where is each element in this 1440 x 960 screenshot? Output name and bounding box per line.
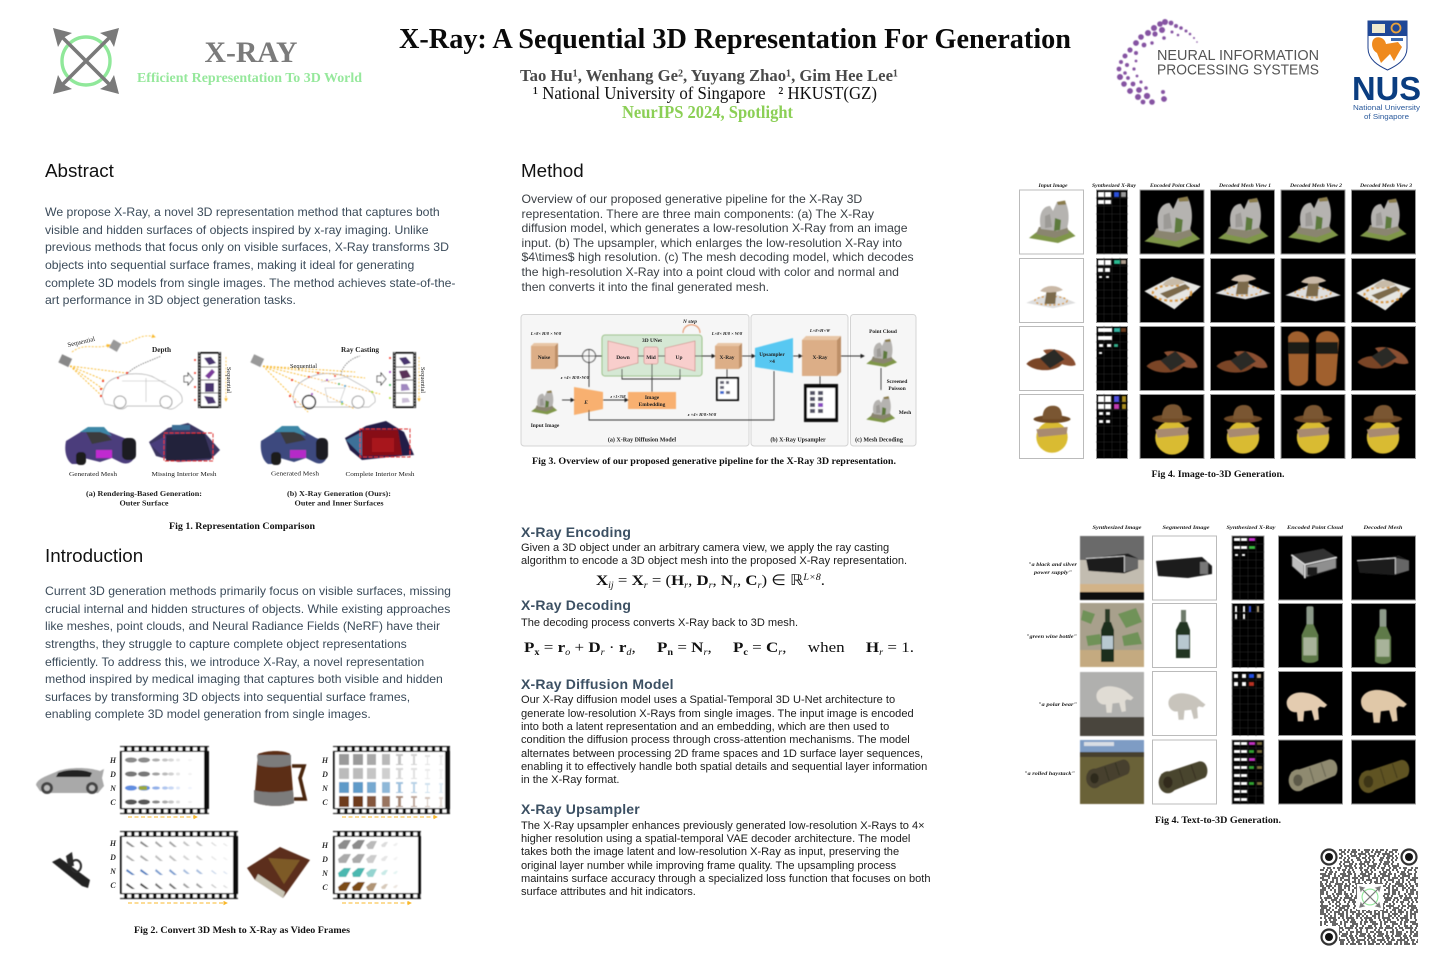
panel: abstract (45, 160, 456, 307)
equation: encoding: N (721, 573, 733, 589)
pipeline labels: Down (616, 355, 630, 361)
channel labels H D N C: D (321, 770, 328, 779)
NeurIPS logo: PROCESSING SYSTEMS (1157, 62, 1319, 78)
equation: decoding: D (588, 640, 601, 656)
header logo: X-Ray: Efficient Representation To 3D World (137, 70, 363, 85)
column headers: Synthesized Image (1092, 525, 1142, 531)
heading: x-ray diffusion model: X-Ray Diffusion Model (521, 676, 674, 692)
column headers (1092, 525, 1403, 531)
rendered meshes (65, 421, 414, 465)
decoded objects (1287, 549, 1409, 793)
figure 5: text-to-3D generation (1024, 525, 1416, 825)
NUS logo: of Singapore (1364, 112, 1409, 121)
column headers (1037, 183, 1412, 189)
introduction text: enabling complete 3D model generation from single images. (45, 707, 371, 721)
equation: decoding: x (534, 647, 540, 657)
text prompts: "a rolled haystack" (1024, 771, 1075, 777)
header logo: X-Ray (53, 28, 363, 94)
pipeline labels: Up (676, 355, 682, 361)
equation: encoding: X (596, 573, 608, 589)
pipeline labels: Point Cloud (869, 329, 897, 335)
abstract text: visible and hidden surfaces of objects inspired by x-ray imaging. Unlike (45, 223, 429, 237)
introduction text: Current 3D generation methods primarily focus on visible surfaces, missing (45, 584, 451, 598)
introduction text: efficiently. To address this, we introduce X-Ray, a novel representation (45, 655, 424, 669)
upsampler text: maintains surface accuracy through a specialized loss function that focuses on both (521, 873, 931, 885)
figure 1 text labels: Sequential (67, 336, 96, 349)
abstract text (45, 205, 456, 307)
text prompts: "a polar bear" (1038, 702, 1077, 708)
x-ray frames (1096, 190, 1128, 458)
title: X-Ray: A Sequential 3D Representation For Generation (399, 23, 1071, 55)
equation: decoding: r (558, 640, 566, 656)
channel labels H D N C: H (321, 756, 329, 765)
equation: decoding: r (703, 647, 708, 657)
NeurIPS logo: NEURAL INFORMATION (1157, 47, 1319, 64)
equation: encoding: , (737, 573, 745, 589)
equation: decoding: = 1. (883, 640, 914, 656)
introduction text: method inspired by medical imaging that captures both visible and hidden (45, 672, 443, 686)
panel backgrounds (521, 314, 916, 446)
column headers: Synthesized X-Ray (1226, 525, 1276, 531)
heading: introduction: Introduction (45, 545, 143, 566)
abstract text: objects into sequential surface frames, making it ideal for generating (45, 258, 414, 272)
abstract text: art performance in 3D object generation tasks. (45, 293, 296, 307)
pipeline labels: Image (645, 395, 660, 401)
diffusion text: enabling it to effectively handle both spatial details and sequential layer information (521, 761, 927, 773)
equation: decoding: = (748, 640, 766, 656)
figure 5 caption: Fig 4. Text-to-3D Generation. (1155, 815, 1281, 825)
film strip 2 (333, 746, 450, 814)
panel: x-ray encoding (521, 524, 907, 590)
pipeline labels: (b) X-Ray Upsampler (770, 436, 826, 444)
equation: decoding: N (691, 640, 704, 656)
method text (522, 192, 914, 294)
equation: encoding: r (644, 580, 648, 590)
decoding text: The decoding process converts X-Ray back to 3D mesh. (521, 617, 798, 629)
NUS logo: National University (1353, 103, 1420, 112)
diffusion text: condition the diffusion process through cross-attention mechanisms. The model (521, 734, 910, 746)
heading: method: Method (521, 160, 584, 181)
figure 1 text labels: (a) Rendering-Based Generation: (86, 491, 202, 498)
figure 1 text labels: Outer Surface (120, 500, 168, 508)
pipeline labels: ×4 (769, 359, 775, 365)
pipeline labels: (a) X-Ray Diffusion Model (608, 436, 676, 444)
method text: the high-resolution X-Ray into a point cloud with color and normal and (522, 265, 899, 279)
channel labels H D N C (109, 756, 329, 892)
introduction text (45, 584, 451, 721)
text prompts: "a black and silver (1028, 562, 1078, 568)
left scheme: rendering based (58, 336, 226, 409)
equation: decoding: c (743, 647, 748, 657)
equation: decoding: = (540, 640, 558, 656)
channel labels H D N C: N (321, 784, 329, 793)
equation: decoding: n (667, 647, 673, 657)
synthesized images (1080, 536, 1144, 804)
NUS logo (1352, 21, 1421, 121)
abstract text: complete 3D models from single images. The method achieves state-of-the- (45, 276, 456, 290)
equation: decoding: r (601, 647, 605, 657)
authors and affiliations: ¹ National University of Singapore ² HKUST(GZ) (533, 83, 877, 103)
pipeline labels: X-Ray (720, 355, 735, 361)
diffusion text: alternates between processing 2D frame spaces and 1D surface layer sequences, (521, 748, 923, 760)
channel labels H D N C: C (322, 883, 328, 892)
film strip 4 (333, 831, 421, 899)
figure 3: generative pipeline (521, 314, 916, 466)
figure 1 text labels: Generated Mesh (271, 470, 320, 478)
equation: decoding: , (707, 640, 733, 656)
figure 4: image-to-3D generation (1020, 183, 1416, 479)
heading: x-ray upsampler: X-Ray Upsampler (521, 801, 640, 817)
figure 1 text labels: Ray Casting (341, 347, 380, 354)
pipeline labels: Embedding (639, 402, 666, 408)
upsampler text: takes both the image latent and low-resolution X-Ray as input, preserving the (521, 846, 899, 858)
column headers: Decoded Mesh View 1 (1218, 183, 1271, 189)
text prompts: power supply" (1033, 570, 1072, 576)
equation: decoding: P (657, 640, 667, 656)
channel labels H D N C: D (321, 855, 328, 864)
column headers: Input Image (1037, 183, 1068, 189)
channel labels H D N C: N (321, 869, 329, 878)
channel labels H D N C: D (109, 770, 116, 779)
figure 2 caption: Fig 2. Convert 3D Mesh to X-Ray as Video Frames (134, 925, 351, 935)
panel: method (521, 160, 914, 294)
x-ray frames (1232, 536, 1264, 804)
pipeline labels: Noise (538, 355, 551, 361)
equation: decoding: r (619, 640, 627, 656)
equation: encoding: r (684, 580, 689, 590)
pipeline labels: Poisson (888, 386, 906, 392)
equation: encoding: ) ∈ ℝ (761, 573, 803, 589)
figure 1 caption: Fig 1. Representation Comparison (169, 521, 315, 531)
introduction text: surfaces by transforming 3D objects into sequential surface frames, (45, 690, 410, 704)
figure 1 text labels: Depth (152, 347, 171, 354)
column headers: Decoded Mesh (1362, 525, 1403, 531)
upsampler text (521, 820, 931, 898)
equation: encoding: r (733, 580, 738, 590)
equation: decoding: r (879, 647, 884, 657)
frame order arrows (128, 817, 437, 903)
figure 1 text labels: Complete Interior Mesh (346, 471, 415, 478)
method text: $4\times$ high resolution. (c) The mesh decoding model, which decodes (522, 250, 914, 264)
upsampler text: surface attributes and hit indicators. (521, 886, 696, 898)
heading: abstract: Abstract (45, 160, 115, 181)
encoding text: Given a 3D object under an arbitrary camera view, we apply the ray casting (521, 542, 889, 554)
generated objects (1026, 196, 1411, 455)
upsampler text: original layer number while improving frame quality. The upsampling process (521, 860, 897, 872)
pipeline labels: L×8× H/8 × W/8 (711, 331, 743, 336)
figure 3 caption: Fig 3. Overview of our proposed generative pipeline for the X-Ray 3D representation. (532, 456, 896, 466)
figure 1 text labels (67, 336, 426, 508)
encoding text: algorithm to encode a 3D object mesh into the proposed X-Ray representation. (521, 555, 907, 567)
channel labels H D N C: N (109, 867, 117, 876)
column headers: Decoded Mesh View 3 (1359, 183, 1412, 189)
input images (1020, 190, 1084, 458)
channel labels H D N C: N (109, 784, 117, 793)
equation: encoding: = ( (648, 573, 671, 589)
encoding text (521, 542, 907, 567)
introduction text: like meshes, point clouds, and Neural Radiance Fields (NeRF) have their (45, 619, 440, 633)
x-ray and decoded cells (1232, 536, 1416, 804)
equation: decoding: o (565, 647, 571, 657)
column headers: Encoded Point Cloud (1149, 183, 1200, 189)
figure 1 text labels: Sequential (290, 363, 317, 370)
column headers: Segmented Image (1162, 525, 1210, 531)
method text: diffusion model, which generates a low-resolution X-Ray from an image (522, 221, 908, 235)
equation: decoding: r (778, 647, 783, 657)
upsampler text: higher resolution using a spatial-temporal VAE decoder architecture. The model (521, 833, 910, 845)
pipeline labels: E (583, 400, 588, 406)
figure 1 text labels: Missing Interior Mesh (152, 471, 217, 478)
figure 4 caption: Fig 4. Image-to-3D Generation. (1152, 469, 1284, 479)
heading: x-ray encoding: X-Ray Encoding (521, 524, 631, 540)
channel labels H D N C: H (321, 841, 329, 850)
authors and affiliations (520, 66, 898, 122)
right scheme: x-ray generation (250, 352, 419, 412)
figure 1 text labels: Sequential (225, 367, 232, 393)
figure 1 text labels: Sequential (419, 367, 426, 393)
equation: decoding: C (766, 640, 778, 656)
figure 1: representation comparison (58, 336, 426, 531)
introduction text: crucial internal and hidden structures of objects. While existing approaches (45, 602, 450, 616)
equation: decoding: = (673, 640, 691, 656)
authors and affiliations: NeurIPS 2024, Spotlight (622, 102, 793, 122)
pipeline labels: (c) Mesh Decoding (855, 436, 903, 444)
equation: decoding: · (605, 640, 619, 656)
diffusion text (521, 694, 927, 786)
objects: car, mug, gun, book (36, 751, 310, 898)
equation: decoding: H (866, 640, 880, 656)
equation: encoding: r (758, 580, 762, 590)
pipeline labels: 3D UNet (642, 338, 662, 344)
method text: input. (b) The upsampler, which enlarges the low-resolution X-Ray into (522, 236, 902, 250)
pipeline labels: z ×4× H/8×W/8 (560, 375, 590, 380)
channel labels H D N C: H (109, 756, 117, 765)
text prompts (1024, 562, 1078, 777)
method text: then converts it into the final generated mesh. (522, 280, 769, 294)
pipeline labels: L×8×H×W (809, 328, 831, 333)
method text: Overview of our proposed generative pipeline for the X-Ray 3D (522, 192, 862, 206)
channel labels H D N C: D (109, 853, 116, 862)
equation: decoding: P (733, 640, 743, 656)
film strip 1 (120, 746, 209, 814)
equation: decoding: d (626, 647, 632, 657)
upsampler text: The X-Ray upsampler enhances previously generated low-resolution X-Rays to 4× (521, 820, 925, 832)
text prompts: "green wine bottle" (1026, 634, 1077, 640)
diffusion text: Our X-Ray diffusion model uses a Spatial-Temporal 3D U-Net architecture to (521, 694, 895, 706)
diffusion text: generate low-resolution X-Rays from single images. The input image is encoded (521, 708, 914, 720)
figure 1 text labels: Outer and Inner Surfaces (294, 500, 384, 508)
pipeline labels: Input Image (531, 423, 560, 429)
column headers: Decoded Mesh View 2 (1289, 183, 1342, 189)
pipeline labels: z ×1×768 (609, 394, 626, 399)
abstract text: We propose X-Ray, a novel 3D representation method that captures both (45, 205, 440, 219)
NeurIPS logo (1117, 19, 1319, 105)
figure 2: mesh to x-ray video frames (36, 746, 450, 935)
equation: encoding: r (709, 580, 713, 590)
synthesized x-ray and result cells (1096, 190, 1416, 458)
pipeline labels: N step (682, 319, 697, 325)
equation: encoding: D (696, 573, 709, 589)
NUS logo: NUS (1352, 70, 1421, 107)
pipeline labels: Screened (887, 379, 907, 385)
channel labels H D N C: H (109, 839, 117, 848)
pipeline labels: Mesh (899, 410, 911, 416)
pipeline labels: X-Ray (813, 355, 828, 361)
column headers: Synthesized X-Ray (1092, 183, 1137, 189)
panel: x-ray diffusion model (521, 676, 927, 786)
equation: decoding: P (524, 640, 534, 656)
pipeline labels: L×8× H/8 × W/8 (530, 331, 562, 336)
panel: x-ray decoding (521, 597, 914, 657)
method text: representation. There are three main components: (a) The X-Ray (522, 207, 875, 221)
equation: encoding: , (713, 573, 721, 589)
channel labels H D N C: C (110, 881, 116, 890)
equation: encoding: = (614, 573, 632, 589)
channel labels H D N C: C (322, 798, 328, 807)
header logo: X-Ray: X-RAY (204, 36, 298, 69)
panel: introduction (45, 545, 451, 721)
equation: decoding: , (631, 640, 657, 656)
diffusion text: into both a latent representation and an embedding, which are then used to (521, 721, 889, 733)
equation: encoding: H (671, 573, 685, 589)
equation: encoding: ij (608, 580, 614, 590)
column headers: Encoded Point Cloud (1286, 525, 1343, 531)
segmented images (1152, 536, 1216, 804)
equation: decoding: , when (782, 640, 866, 656)
authors and affiliations: Tao Hu¹, Wenhang Ge², Yuyang Zhao¹, Gim Hee Lee¹ (520, 66, 898, 85)
diffusion text: in the X-Ray format. (521, 774, 620, 786)
equation: encoding: L×8 (802, 572, 821, 582)
introduction text: strengths, they struggle to capture complete object representations (45, 637, 407, 651)
channel labels H D N C: C (110, 798, 116, 807)
heading: x-ray decoding: X-Ray Decoding (521, 597, 631, 613)
panel: x-ray upsampler (521, 801, 931, 898)
figure 1 text labels: (b) X-Ray Generation (Ours): (287, 491, 391, 498)
pipeline labels: z ×4× H/8×W/8 (687, 412, 717, 417)
equation: encoding: , (688, 573, 696, 589)
QR code (1319, 847, 1419, 947)
pipeline labels (530, 319, 911, 444)
abstract text: previous methods that focus only on visible surfaces, X-Ray transforms 3D (45, 240, 449, 254)
equation: encoding: X (632, 573, 644, 589)
equation: decoding: + (570, 640, 588, 656)
equation: encoding: C (745, 573, 758, 589)
equation: encoding: . (821, 573, 825, 589)
figure 1 text labels: Generated Mesh (69, 471, 118, 478)
pipeline labels: Mid (646, 355, 656, 361)
pipeline diagram (531, 325, 897, 423)
pipeline labels: Upsampler (759, 352, 785, 358)
film strip 3 (120, 831, 238, 899)
